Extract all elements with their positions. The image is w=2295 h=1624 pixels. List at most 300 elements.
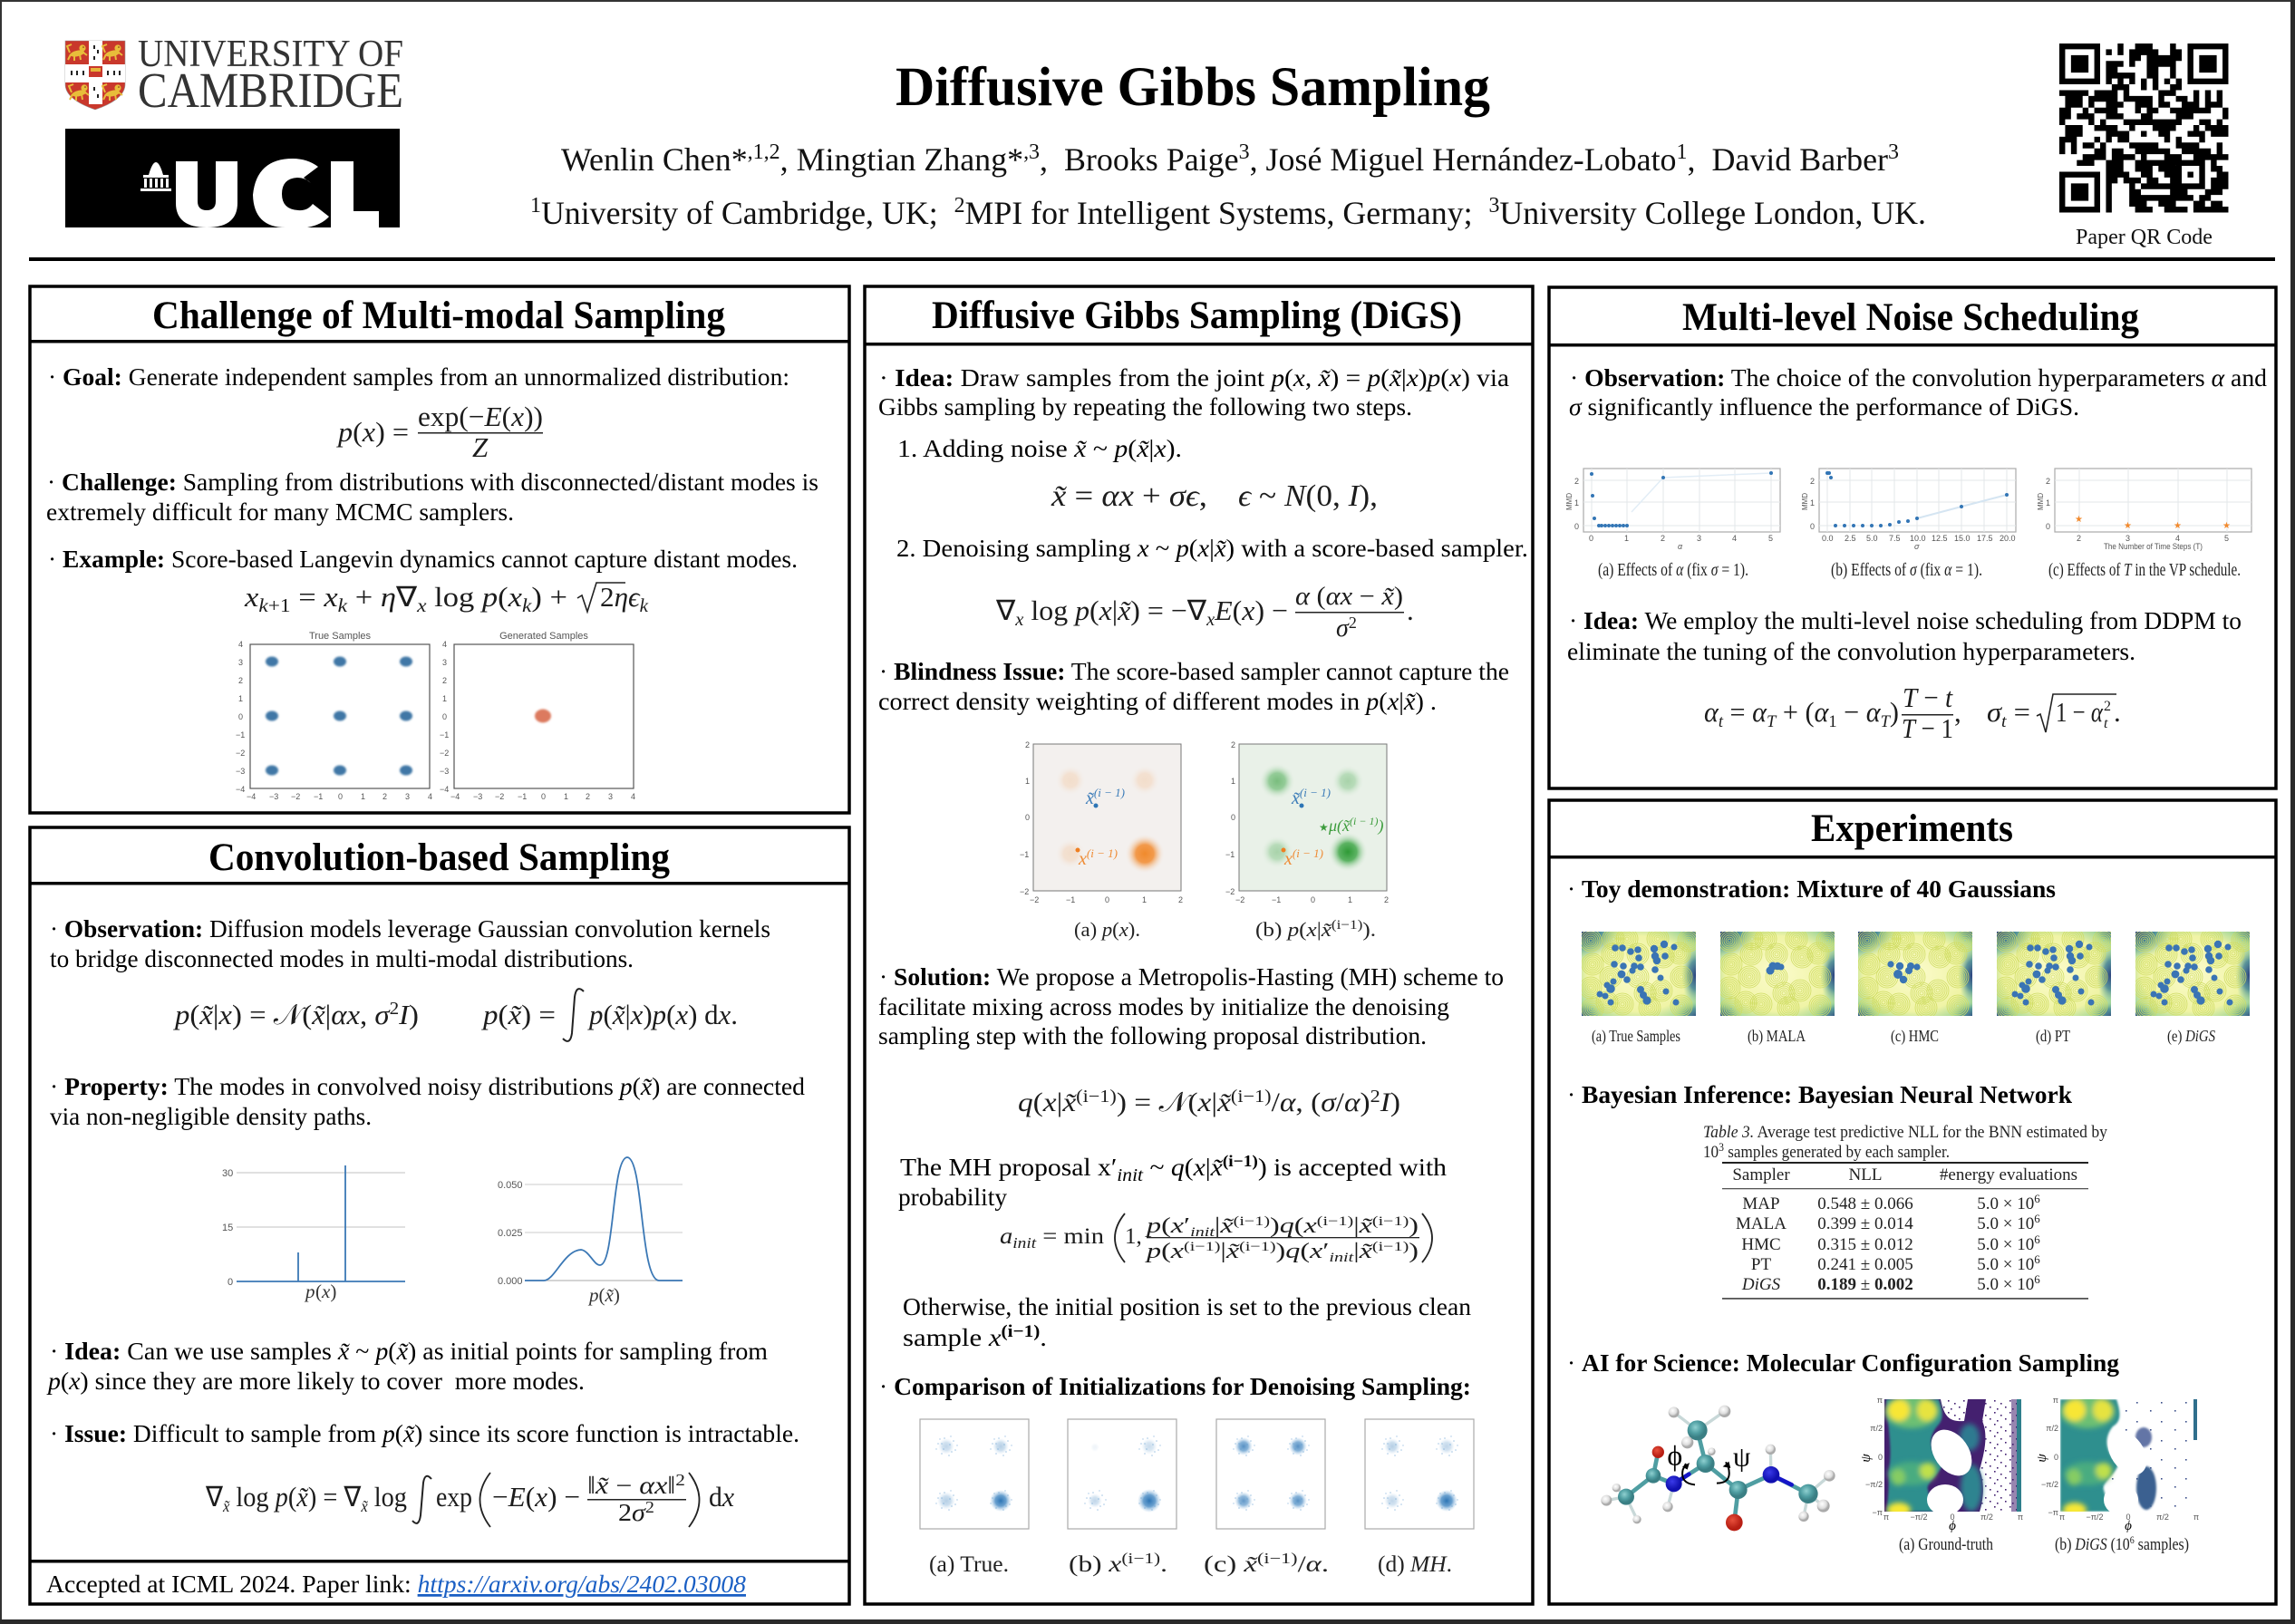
table: NLL results: DiGS bbox=[1741, 1275, 1781, 1294]
chart: DiGS Ramachandran heatmap bbox=[2035, 1396, 2199, 1554]
chart: true samples vs generated samples: 2 bbox=[382, 792, 387, 801]
text: MH proposal: q(x|x̃ bbox=[1171, 1153, 1222, 1181]
equation: acceptance probability: ) bbox=[1409, 1214, 1419, 1238]
chart: ground-truth Ramachandran heatmap: π/2 bbox=[1980, 1513, 1993, 1522]
chart: noisy sample over alpha: / bbox=[1298, 1552, 1306, 1577]
authors: ,1,2 bbox=[748, 140, 780, 164]
chart: DiGS contour bbox=[2097, 904, 2271, 1046]
equation: conditional score: p(x|x̃) = −∇ bbox=[1075, 594, 1205, 626]
chart: true samples vs generated samples: 1 bbox=[564, 792, 568, 801]
equation: convolution kernel bbox=[173, 989, 738, 1041]
affiliations: 1 bbox=[530, 194, 541, 218]
chart: true samples vs generated samples: 0 bbox=[238, 712, 243, 721]
equation: convolution kernel: I bbox=[398, 999, 411, 1030]
equation: acceptance probability: (i−1) bbox=[1317, 1214, 1353, 1229]
text: blindness issue: correct density weighting of different modes in p(x|x̃) . bbox=[878, 687, 1437, 715]
chart: true samples vs generated samples: 3 bbox=[405, 792, 410, 801]
text: observation: to bridge disconnected modes in multi-modal distributions. bbox=[50, 944, 634, 972]
chart: DiGS Ramachandran heatmap: ψ bbox=[2035, 1454, 2049, 1463]
table: NLL results: 3 bbox=[1719, 1140, 1724, 1154]
chart: smoothed p(x-tilde) density bbox=[498, 1157, 683, 1306]
equation: Langevin update: x bbox=[416, 594, 427, 616]
chart: ground-truth Ramachandran heatmap: π bbox=[2018, 1513, 2023, 1522]
equation: Langevin update: 2ηϵ bbox=[600, 581, 639, 613]
table: NLL results: #energy evaluations bbox=[1940, 1165, 2077, 1184]
equation: noise schedule: , bbox=[1954, 696, 1961, 728]
equation: acceptance probability: x̃ bbox=[1358, 1214, 1373, 1238]
chart: noisy sample over alpha: (c) x̃ bbox=[1204, 1552, 1254, 1577]
equation: acceptance probability: (i−1) bbox=[1239, 1240, 1276, 1254]
chart: DiGS Ramachandran heatmap: −π/2 bbox=[2087, 1513, 2103, 1522]
table: NLL results: 6 bbox=[2034, 1212, 2040, 1225]
chart: effect of alpha: 0 bbox=[1574, 522, 1579, 531]
text: MH proposal bbox=[898, 1152, 1447, 1211]
equation: noise schedule: t bbox=[2001, 712, 2007, 731]
chart: DiGS Ramachandran heatmap: −π bbox=[2048, 1508, 2058, 1517]
equation: proposal distribution: (i−1) bbox=[1231, 1087, 1272, 1107]
chart: true samples vs generated samples: −2 bbox=[236, 749, 245, 758]
equation: convolution kernel: p(x̃|x)p(x) dx. bbox=[587, 999, 738, 1030]
equation: acceptance probability: | bbox=[1353, 1214, 1360, 1238]
authors: 1 bbox=[1677, 140, 1688, 164]
chart: effect of alpha: 0 bbox=[1589, 534, 1593, 543]
equation: acceptance probability: 1, bbox=[1125, 1224, 1142, 1249]
equation: noise schedule: + ( bbox=[1776, 696, 1815, 728]
equation: Langevin update: p(x bbox=[482, 581, 520, 613]
table: NLL results: NLL bbox=[1849, 1165, 1882, 1184]
logo: UCL bbox=[65, 129, 400, 227]
text: otherwise: sample x bbox=[903, 1323, 1000, 1351]
chart: conditional heatmap: −1 bbox=[1225, 850, 1235, 859]
equation: proposal distribution: 2 bbox=[1370, 1087, 1380, 1107]
text: idea bbox=[46, 1337, 768, 1395]
chart: conditional heatmap: (i − 1) bbox=[1300, 786, 1331, 799]
chart: DiGS Ramachandran heatmap: π bbox=[2059, 1513, 2065, 1522]
text: observation bbox=[50, 914, 770, 972]
equation: acceptance probability: | bbox=[1220, 1240, 1226, 1263]
chart: effect of sigma: 5.0 bbox=[1866, 534, 1878, 543]
equation: intractable score: −E(x) − bbox=[492, 1481, 580, 1513]
equation: acceptance probability: | bbox=[1215, 1214, 1220, 1238]
panel: Multi-level Noise Scheduling bbox=[1549, 287, 2276, 788]
equation: noise schedule: T bbox=[1881, 712, 1891, 731]
chart: effect of T: 1 bbox=[2046, 498, 2050, 508]
chart: smoothed p(x-tilde) density: 0.025 bbox=[498, 1228, 523, 1239]
chart: effect of T: ★ bbox=[2075, 515, 2083, 525]
equation: noise schedule: α bbox=[1866, 696, 1881, 728]
logo: University of Cambridge bbox=[65, 34, 403, 118]
equation: acceptance probability bbox=[1000, 1213, 1432, 1265]
equation: intractable score: dx bbox=[709, 1481, 734, 1513]
text: otherwise: . bbox=[1040, 1323, 1047, 1351]
equation: noise: ϵ ~ N(0, I), bbox=[1238, 479, 1378, 513]
chart: p(x) spikes: p bbox=[304, 1281, 315, 1302]
text: comparison heading: · Comparison of Initializations for Denoising Sampling: bbox=[879, 1372, 1471, 1400]
chart: true samples vs generated samples: −3 bbox=[269, 792, 278, 801]
chart: effect of alpha: α bbox=[1678, 542, 1683, 551]
QR code bbox=[2059, 44, 2228, 249]
chart: HMC contour: (c) HMC bbox=[1891, 1027, 1939, 1046]
text: challenge: extremely difficult for many MCMC samplers. bbox=[46, 498, 514, 526]
chart: true samples vs generated samples: 2 bbox=[442, 676, 447, 685]
table: NLL results: 5.0 × 10 bbox=[1977, 1275, 2034, 1294]
equation: Langevin update: x bbox=[323, 581, 338, 613]
chart: true samples vs generated samples: 3 bbox=[442, 658, 447, 667]
chart: p(x) heatmap: 2 bbox=[1178, 895, 1183, 904]
chart: effect of sigma: σ bbox=[1914, 542, 1920, 551]
text: challenge: · Challenge: Sampling from distributions with disconnected/distant modes is bbox=[47, 468, 818, 496]
equation: convolution kernel: p(x̃|x) = 𝒩(x̃|αx, σ bbox=[175, 999, 389, 1030]
icon: Cambridge shield bbox=[65, 41, 125, 110]
chart: true samples contour: (a) True Samples bbox=[1592, 1027, 1680, 1046]
chart: conditional heatmap: (i − 1) bbox=[1293, 846, 1323, 860]
equation: Langevin update: +1 bbox=[268, 594, 291, 616]
header: logos, title, authors and QR code bbox=[65, 34, 2228, 249]
equation: target density: Z bbox=[472, 431, 489, 463]
equation: noise schedule: 1 − α bbox=[2056, 696, 2104, 728]
text: MH proposal: init bbox=[1117, 1165, 1144, 1185]
equation: acceptance probability: (i−1) bbox=[1234, 1214, 1270, 1229]
chart: p(x) heatmap: x̃ bbox=[1086, 788, 1094, 808]
equation: intractable score: x̃ bbox=[222, 1497, 230, 1515]
equation: noise schedule: − bbox=[1837, 696, 1866, 728]
chart: true samples vs generated samples: −4 bbox=[236, 785, 245, 794]
text: property: · Property: The modes in convolved noisy distributions p(x̃) are connected bbox=[50, 1072, 805, 1100]
table: NLL results: 10 bbox=[1703, 1143, 1720, 1162]
equation: intractable score: log bbox=[229, 1481, 276, 1513]
chart: conditional heatmap: x̃ bbox=[1292, 788, 1300, 808]
equation: Langevin update: log bbox=[426, 581, 482, 613]
equation: noise schedule: α bbox=[1815, 696, 1829, 728]
text: otherwise: Otherwise, the initial position is set to the previous clean bbox=[903, 1292, 1471, 1320]
chart: effect of sigma: 0 bbox=[1810, 522, 1815, 531]
chart: conditional heatmap: x bbox=[1284, 849, 1293, 869]
chart: true samples vs generated samples: −4 bbox=[440, 785, 449, 794]
logo: University of Cambridge: CAMBRIDGE bbox=[138, 63, 403, 118]
icon: alanine dipeptide molecule bbox=[1601, 1406, 1835, 1531]
chart: p(x) heatmap: 0 bbox=[1105, 895, 1109, 904]
chart: true samples vs generated samples: 0 bbox=[338, 792, 343, 801]
chart: true samples vs generated samples: −1 bbox=[440, 730, 449, 740]
equation: noise: x̃ = αx + σϵ, bbox=[1051, 479, 1207, 513]
chart: effect of sigma: 7.5 bbox=[1889, 534, 1901, 543]
equation: conditional score: 2 bbox=[1349, 614, 1357, 632]
chart: conditional heatmap: μ(x̃ bbox=[1329, 817, 1350, 835]
chart: ground-truth Ramachandran heatmap: 0 bbox=[1950, 1513, 1955, 1522]
equation: conditional score: x bbox=[1014, 610, 1024, 630]
table: NLL results: 5.0 × 10 bbox=[1977, 1235, 2034, 1254]
equation: acceptance probability: a bbox=[1000, 1224, 1012, 1249]
chart: effect of sigma: 2.5 bbox=[1845, 534, 1856, 543]
equation: acceptance probability: ) bbox=[1270, 1214, 1280, 1238]
equation: conditional score: ∇ bbox=[996, 594, 1015, 626]
equation: noise schedule: t bbox=[1719, 712, 1724, 731]
chart: ground-truth Ramachandran heatmap: ϕ bbox=[1949, 1519, 1956, 1533]
chart: DiGS Ramachandran heatmap: 6 bbox=[2130, 1533, 2135, 1546]
text: property bbox=[50, 1072, 805, 1130]
chart: ground-truth Ramachandran heatmap: π/2 bbox=[1870, 1424, 1883, 1433]
chart: effect of alpha: 1 bbox=[1624, 534, 1629, 543]
chart: conditional heatmap: (i − 1) bbox=[1350, 815, 1378, 827]
chart: p(x) heatmap: 1 bbox=[1025, 777, 1030, 786]
text: MH proposal: (i−1) bbox=[1223, 1152, 1258, 1171]
table: NLL results: samples generated by each sampler. bbox=[1724, 1143, 1950, 1162]
text: idea bbox=[878, 363, 1509, 420]
affiliations: University of Cambridge, UK; bbox=[541, 195, 954, 231]
chart: effect of alpha bbox=[1565, 469, 1780, 580]
authors: , David Barber bbox=[1688, 141, 1888, 178]
text: idea: · Idea: We employ the multi-level noise scheduling from DDPM to bbox=[1569, 606, 2242, 634]
table: NLL results: 5.0 × 10 bbox=[1977, 1214, 2034, 1233]
text: idea: · Idea: Draw samples from the joint p(x, x̃) = p(x̃|x)p(x) via bbox=[879, 363, 1509, 392]
equation: noise schedule: α bbox=[1752, 696, 1767, 728]
chart: p(x) spikes: (x) bbox=[315, 1281, 336, 1302]
equation: noise schedule: t bbox=[2104, 716, 2108, 731]
chart: p(x) heatmap bbox=[1020, 740, 1183, 941]
equation: proposal distribution: α, (σ/α) bbox=[1280, 1088, 1369, 1117]
chart: conditional heatmap: ) bbox=[1377, 817, 1383, 836]
chart: MH initialisation: (d) MH. bbox=[1378, 1552, 1452, 1577]
equation: intractable score: exp bbox=[436, 1481, 472, 1513]
chart: DiGS Ramachandran heatmap: 0 bbox=[2126, 1513, 2131, 1522]
chart: effect of alpha: (a) Effects of α (fix σ = 1). bbox=[1598, 560, 1748, 580]
chart: p(x) heatmap: −1 bbox=[1020, 850, 1029, 859]
chart: true samples vs generated samples: 1 bbox=[361, 792, 365, 801]
chart: effect of sigma: 0.0 bbox=[1822, 534, 1834, 543]
chart: MH initialisation bbox=[1365, 1419, 1474, 1577]
chart: effect of T: ★ bbox=[2222, 521, 2231, 531]
equation: Langevin update: k bbox=[338, 594, 348, 616]
chart: ground-truth Ramachandran heatmap: −π bbox=[1873, 1508, 1883, 1517]
equation: acceptance probability: p(x′ bbox=[1147, 1214, 1188, 1238]
text: solution: · Solution: We propose a Metropolis-Hasting (MH) scheme to bbox=[879, 962, 1504, 991]
text: MH proposal: probability bbox=[898, 1183, 1007, 1211]
chart: effect of sigma: 1 bbox=[1810, 498, 1815, 508]
table: NLL results bbox=[1703, 1123, 2107, 1300]
chart: true samples vs generated samples: Generated Samples bbox=[499, 631, 588, 642]
chart: DiGS Ramachandran heatmap: samples) bbox=[2135, 1535, 2189, 1554]
chart: previous clean sample: (b) x bbox=[1069, 1552, 1119, 1577]
chart: noisy sample over alpha: (i−1) bbox=[1257, 1550, 1298, 1567]
chart: p(x) spikes: 30 bbox=[222, 1168, 233, 1179]
chart: DiGS Ramachandran heatmap: −π/2 bbox=[2041, 1480, 2058, 1489]
text: blindness issue: · Blindness Issue: The score-based sampler cannot capture the bbox=[879, 657, 1509, 685]
heading: Experiments bbox=[1811, 807, 2013, 850]
equation: intractable score: 2 bbox=[645, 1498, 654, 1516]
table: NLL results: 6 bbox=[2034, 1192, 2040, 1205]
chart: effect of sigma: MMD bbox=[1801, 493, 1809, 510]
equation: intractable score: ‖x̃ − αx‖ bbox=[587, 1472, 674, 1499]
chart: effect of T: 0 bbox=[2046, 522, 2050, 531]
table: NLL results: 6 bbox=[2034, 1252, 2040, 1266]
heading: Convolution-based Sampling bbox=[208, 836, 670, 879]
panel: Diffusive Gibbs Sampling (DiGS) bbox=[865, 286, 1533, 1604]
equation: noise schedule: T − 1 bbox=[1902, 712, 1953, 744]
equation: conditional score: . bbox=[1407, 594, 1414, 626]
chart: conditional heatmap: (i−1) bbox=[1331, 918, 1362, 933]
chart: ground-truth Ramachandran heatmap: π bbox=[1877, 1396, 1883, 1405]
chart: p(x) heatmap: (i − 1) bbox=[1087, 846, 1118, 860]
text: observation: · Observation: Diffusion models leverage Gaussian convolution kernels bbox=[50, 914, 770, 942]
chart: ground-truth Ramachandran heatmap: ψ bbox=[1859, 1454, 1874, 1463]
chart: true samples vs generated samples: 4 bbox=[442, 640, 447, 649]
chart: effect of T: ★ bbox=[2124, 521, 2132, 531]
equation: conditional score: α (αx − x̃) bbox=[1295, 583, 1403, 611]
text: otherwise bbox=[903, 1292, 1471, 1351]
equation: acceptance probability: ) bbox=[1276, 1240, 1285, 1263]
equation: acceptance probability: init bbox=[1012, 1234, 1038, 1252]
chart: p(x) heatmap: 1 bbox=[1142, 895, 1147, 904]
chart: previous clean sample: (i−1) bbox=[1121, 1550, 1160, 1567]
text: idea: Gibbs sampling by repeating the following two steps. bbox=[878, 392, 1412, 420]
authors: , José Miguel Hernández-Lobato bbox=[1250, 141, 1677, 178]
equation: intractable score: 2 bbox=[675, 1471, 685, 1489]
text: MH proposal: ~ bbox=[1143, 1153, 1171, 1181]
equation: acceptance probability: q(x′ bbox=[1285, 1240, 1328, 1263]
text: blindness issue bbox=[878, 657, 1509, 715]
equation: intractable score: p(x̃) = ∇ bbox=[276, 1481, 366, 1513]
chart: p(x) heatmap: −2 bbox=[1030, 895, 1039, 904]
chart: effect of T: 4 bbox=[2175, 534, 2180, 543]
text: MH proposal: ) is accepted with bbox=[1258, 1153, 1447, 1181]
table: NLL results: HMC bbox=[1741, 1235, 1781, 1254]
equation: Langevin update: = bbox=[291, 581, 324, 613]
chart: true samples contour bbox=[1544, 904, 1718, 1046]
chart: true samples vs generated samples: −2 bbox=[440, 749, 449, 758]
text: challenge bbox=[46, 468, 818, 526]
text: MH proposal: The MH proposal x′ bbox=[900, 1153, 1101, 1181]
equation: Langevin update: ) + bbox=[531, 581, 567, 613]
text: idea: p(x) since they are more likely to cover more modes. bbox=[46, 1367, 585, 1395]
chart: conditional heatmap: −1 bbox=[1272, 895, 1281, 904]
equation: conditional score: σ bbox=[1336, 614, 1350, 643]
chart: p(x) heatmap: (i − 1) bbox=[1094, 786, 1125, 799]
heading: Multi-level Noise Scheduling bbox=[1682, 296, 2139, 339]
text: property: via non-negligible density paths. bbox=[50, 1102, 372, 1130]
chart: effect of sigma: 17.5 bbox=[1977, 534, 1993, 543]
chart: true samples vs generated samples: 1 bbox=[442, 694, 447, 703]
logo: University of Cambridge: UNIVERSITY OF bbox=[138, 34, 403, 75]
chart: true samples vs generated samples: −3 bbox=[473, 792, 482, 801]
authors: Wenlin Chen* bbox=[561, 141, 748, 178]
equation: target density: p(x) = bbox=[336, 416, 409, 448]
chart: effect of alpha: MMD bbox=[1565, 493, 1574, 510]
equation: noise schedule: 1 bbox=[1828, 712, 1837, 731]
equation: intractable score: x̃ bbox=[360, 1497, 369, 1515]
panel: Convolution-based Sampling bbox=[30, 827, 849, 1604]
equation: acceptance probability: ) bbox=[1409, 1240, 1419, 1263]
text: idea: eliminate the tuning of the convolution hyperparameters. bbox=[1567, 637, 2135, 665]
equation: proposal distribution: ) bbox=[1390, 1088, 1399, 1117]
equation: proposal distribution: (i−1) bbox=[1076, 1087, 1117, 1107]
chart: effect of alpha: 2 bbox=[1574, 477, 1579, 486]
icon: alanine dipeptide molecule: ϕ bbox=[1667, 1439, 1682, 1472]
equation: intractable score: 2σ bbox=[618, 1499, 644, 1526]
equation: acceptance probability: | bbox=[1353, 1240, 1360, 1263]
affiliations: University College London, UK. bbox=[1499, 195, 1926, 231]
equation: proposal distribution: x|x̃ bbox=[1198, 1088, 1229, 1117]
authors: 3 bbox=[1888, 140, 1899, 164]
equation: intractable score: ∇ bbox=[206, 1481, 225, 1513]
text: observation bbox=[1569, 363, 2267, 420]
equation: acceptance probability: (i−1) bbox=[1372, 1214, 1409, 1229]
equation: noise schedule: 2 bbox=[2104, 699, 2111, 714]
chart: true samples: (a) True. bbox=[929, 1552, 1009, 1577]
equation: noise schedule: σ bbox=[1987, 696, 2003, 728]
chart: p(x) heatmap: x bbox=[1079, 849, 1087, 869]
chart: DiGS Ramachandran heatmap: π/2 bbox=[2046, 1424, 2058, 1433]
equation: conditional score: (x) − bbox=[1233, 594, 1287, 626]
text: goal: · Goal: Generate independent samples from an unnormalized distribution: bbox=[48, 362, 789, 391]
equation: convolution kernel: ) bbox=[409, 999, 418, 1030]
chart: DiGS Ramachandran heatmap: π/2 bbox=[2156, 1513, 2169, 1522]
text: idea bbox=[1567, 606, 2242, 665]
text: solution bbox=[878, 962, 1504, 1049]
chart: effect of sigma: 20.0 bbox=[2000, 534, 2016, 543]
equation: acceptance probability: = min bbox=[1036, 1224, 1105, 1249]
chart: true samples vs generated samples: 2 bbox=[238, 676, 243, 685]
equation: acceptance probability: init bbox=[1329, 1251, 1354, 1265]
equation: acceptance probability: p(x bbox=[1147, 1240, 1180, 1263]
affiliations: MPI for Intelligent Systems, Germany; bbox=[965, 195, 1488, 231]
table: NLL results: 5.0 × 10 bbox=[1977, 1194, 2034, 1213]
text: toy demonstration heading: · Toy demonstration: Mixture of 40 Gaussians bbox=[1567, 875, 2056, 903]
equation: acceptance probability: (i−1) bbox=[1372, 1240, 1409, 1254]
chart: true samples vs generated samples: 4 bbox=[428, 792, 432, 801]
chart: true samples vs generated samples: 1 bbox=[238, 694, 243, 703]
equation: acceptance probability: x̃ bbox=[1358, 1240, 1373, 1263]
chart: p(x) heatmap: −2 bbox=[1020, 887, 1029, 896]
chart: p(x) heatmap: −1 bbox=[1066, 895, 1075, 904]
chart: effect of T: 3 bbox=[2126, 534, 2130, 543]
QR code: Paper QR Code bbox=[2076, 226, 2213, 249]
chart: true samples vs generated samples: −4 bbox=[450, 792, 460, 801]
chart: noisy sample over alpha: α. bbox=[1306, 1552, 1327, 1577]
affiliations: 3 bbox=[1488, 194, 1499, 218]
table: NLL results: 0.548 ± 0.066 bbox=[1817, 1194, 1913, 1213]
text: AI for Science heading: · AI for Science: Molecular Configuration Sampling bbox=[1567, 1348, 2119, 1377]
chart: DiGS Ramachandran heatmap: (b) DiGS (10 bbox=[2055, 1535, 2135, 1554]
chart: true samples bbox=[920, 1419, 1029, 1577]
chart: ground-truth Ramachandran heatmap: 0 bbox=[1878, 1453, 1883, 1462]
equation: acceptance probability: x̃ bbox=[1225, 1240, 1240, 1263]
chart: effect of T: (c) Effects of T in the VP schedule. bbox=[2048, 560, 2241, 580]
text: idea: · Idea: Can we use samples x̃ ~ p(x̃) as initial points for sampling from bbox=[50, 1337, 768, 1365]
chart: conditional heatmap: −2 bbox=[1225, 887, 1235, 896]
chart: true samples vs generated samples: 3 bbox=[608, 792, 613, 801]
chart: ground-truth Ramachandran heatmap: −π/2 bbox=[1911, 1513, 1927, 1522]
chart: MALA contour bbox=[1682, 904, 1856, 1046]
equation: conditional score bbox=[995, 583, 1414, 643]
chart: DiGS Ramachandran heatmap: 0 bbox=[2054, 1453, 2058, 1462]
table: NLL results: 0.399 ± 0.014 bbox=[1817, 1214, 1913, 1233]
chart: conditional heatmap: 0 bbox=[1231, 813, 1235, 822]
chart: effect of T: MMD bbox=[2037, 493, 2045, 510]
equation: proposal distribution: ) = 𝒩( bbox=[1117, 1088, 1198, 1117]
chart: HMC contour bbox=[1820, 904, 1994, 1046]
chart: effect of alpha: 1 bbox=[1574, 498, 1579, 508]
table: NLL results: 0.241 ± 0.005 bbox=[1817, 1255, 1913, 1274]
chart: ground-truth Ramachandran heatmap: (a) Ground-truth bbox=[1899, 1535, 1993, 1554]
chart: conditional heatmap: 2 bbox=[1384, 895, 1389, 904]
chart: MALA contour: (b) MALA bbox=[1748, 1027, 1806, 1046]
panel: Experiments bbox=[1544, 800, 2276, 1604]
chart: conditional heatmap: 1 bbox=[1348, 895, 1352, 904]
chart: effect of sigma: 10.0 bbox=[1910, 534, 1926, 543]
chart: smoothed p(x-tilde) density: 0.050 bbox=[498, 1180, 523, 1191]
equation: intractable score bbox=[205, 1471, 734, 1527]
chart: effect of sigma: (b) Effects of σ (fix α = 1). bbox=[1831, 560, 1982, 580]
